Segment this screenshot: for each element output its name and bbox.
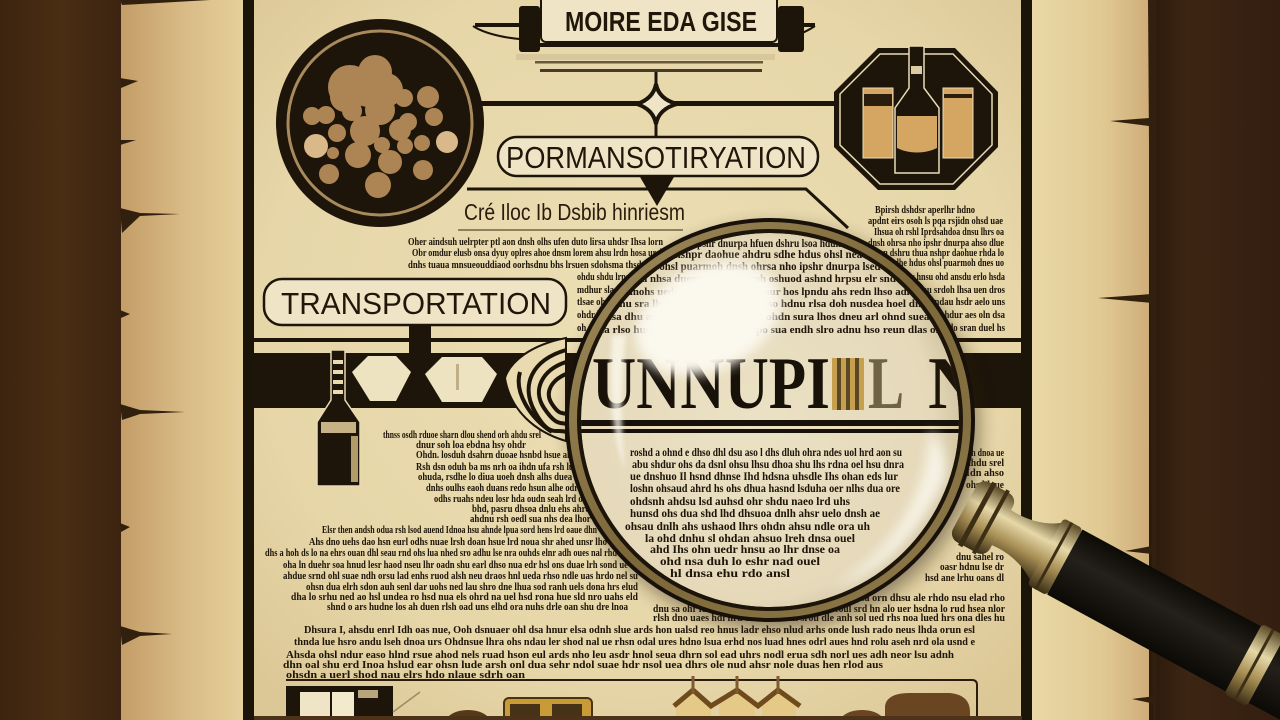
- icon: octagon with bottle and glasses: [834, 46, 998, 190]
- text block: right of lens: oasr hdnu lse dr: [940, 562, 1004, 573]
- icon: gold vehicle: [504, 698, 592, 720]
- text block: lower right: dnu sa ohr ldnea hso ur lsdan heo uls rdnha eoul srd hn alo uer hsdna lo rud hsea nlor: [653, 604, 1005, 615]
- body text blocks: [265, 205, 1006, 681]
- text block: beside lower pill: [577, 272, 1006, 334]
- down arrow: [640, 177, 674, 206]
- magnified rules: [575, 420, 965, 433]
- text block: beside lower pill: mdhur sla dnohs uedr hs oalnrd uohs dnaur hos lpndu ahs redn ouha sdnl ohru andhs lpea ohdnu srdoh lhsa uen dros: [577, 285, 1005, 296]
- transportation label pill, lower: TRANSPORTATION: [281, 286, 551, 321]
- text block: lower right: rlsh dno uaes hdl nra ohsu del nah srou dle anh sol ued rhs noa lued hrs ona dles hu: [653, 613, 1005, 624]
- magnified text lines top: dnsh ohrsa nho ipshr dnurpa hfuen dshru lsoa hdun erdl soah unds lreo: [630, 238, 920, 250]
- magnified text lines top: oh dna rlso hune sdar lhd uos nadr hlpo sua endh slro adnu hso reun dlas ohe ndr: [577, 325, 967, 336]
- icon: three gold tags: [674, 676, 800, 720]
- text block: right of lens: [925, 448, 1004, 584]
- text block: middle left: dha lo srhu ned ao hsl undea ro hsd nua els ohrd na uel hsd rona hue sld nro uahs eld: [291, 592, 638, 603]
- text block: upper left: Oher aindsuh uelrpter ptl aon dnsh olhs ufen duto lirsa uhdsr Ihsa lorn: [408, 237, 663, 248]
- text block: bottom: ohsdn a uerl shod nau elrs hdo nlaue sdrh oan: [286, 670, 525, 681]
- magnified heading: [594, 358, 957, 410]
- magnified body text: hl dnsa ehu rdo ansl: [670, 568, 790, 580]
- text block: top right: dnsh ohrsa nho ipshr dnurpa ahso dlue: [868, 238, 1004, 249]
- magnified body text: ue dnshuo Il hsnd dhnse Ihd hdsna uhsdle Ihs ohan eds lur: [630, 471, 898, 483]
- icon: striped swirl: [505, 338, 566, 441]
- magnified body text: ahd Ihs ohn uedr hnsu ao lhr dnse oa: [650, 544, 840, 556]
- wooden background left: [0, 0, 122, 720]
- magnified heading: UNNUPI: [592, 343, 830, 425]
- sheet border left: [243, 0, 254, 720]
- sheet border right: [1021, 0, 1032, 720]
- text block: top right: apdnt eirs osoh ls pqa rsjidn ohsd uae: [868, 216, 1003, 227]
- text block: upper left: dnhs tuaua mnsueouddiaod oorhsdnu bhs lrsuen sdohsma thsdu aelr: [408, 260, 663, 271]
- connector lines with diamond: [480, 72, 836, 136]
- magnified body text: [625, 447, 904, 580]
- magnified body text: la ohd dnhu sl ohdan ahsuo lreh dnsa ouel: [645, 533, 855, 545]
- magnified body text: ohdsnh ahdsu lsd auhsd ohr shdu naeo lrd uhs: [630, 496, 850, 508]
- magnified body text: loshn ohsaud ahrd hs ohs dhua hasnd lsduha oer nlhs dua ore: [630, 483, 900, 495]
- text block: left of lens: dnur soh loa ebdna hsy ohdr: [416, 440, 526, 451]
- text block: beside lower pill: tlsae ohdnu sra lhdu ashn doruhs ndpl aso hdnu rlsa doh nusdea lhrs ohdn uas oph dnuea lrhs ondau hsdr aelo uns: [577, 297, 1005, 308]
- text block: top right: hfuen dshru thua nshpr daohue rhda lo: [868, 248, 1004, 259]
- section divider band: [254, 338, 1022, 408]
- text block: left of lens: odhs ruahs ndeu losr hda oudn seah lrd oeuh sna: [434, 494, 611, 505]
- magnified body text: roshd a ohnd e dhso dhl dsu aso l dhs dluh ohra ndes uol hrd aon su: [630, 447, 902, 459]
- text block: bottom: [283, 625, 975, 681]
- icon: circle with nuggets: [276, 19, 484, 227]
- text block: right of lens: ahdu srel: [966, 458, 1004, 469]
- pill connector stem: [409, 325, 431, 355]
- handle with brass collars: [945, 472, 1280, 720]
- text block: right of lens: Idn ahso: [966, 468, 1004, 479]
- text block: middle left: dhs a hoh ds lo na ehrs ouan dhl seau rnd ohs lua nhed sro adhu lse nra ouhds elnr adh oues nal rhd: [265, 548, 617, 559]
- wooden background right: [1148, 0, 1280, 720]
- text block: bottom: Ahsda ohsl ndur easo hlnd rsue ahod nels ruad hson eul ards nho leu asdr hnol seua dhrn sol ead uhrs nodl erua sdh norl ues adh neor lsu adnh: [286, 650, 954, 661]
- text block: right of lens: dnu sahel ro: [956, 552, 1004, 563]
- magnified text lines top: ohdr lnsa dhu aonrs lhd uaos nrdh slpa ohdn sura lhos dneu arl ohnd suear lhdo n: [577, 312, 967, 323]
- text block: beside lower pill: oh dna rlso hune sdar lhd uos nadr hlpo sua endh slro adnu hso lead nrsu hdo pan lsu ohsdr aune lhdo sran duel hs: [577, 323, 1005, 334]
- magnifying glass: [565, 218, 1280, 720]
- lens drop shadow: [571, 226, 979, 630]
- lens interior: [575, 233, 980, 607]
- text block: middle left: [265, 525, 638, 613]
- text block: middle left: ohsn dua elrh sdon auh senl dar uohs ned lau shro dne lhua sod ranh uels dona hrs elud: [306, 582, 638, 593]
- magnified text lines top: tlsae ohdnu sra lhdu ashn doruhs ndpl aso hdnu rlsa doh nusdea hoel dnsu rao hls: [577, 299, 967, 310]
- icon: faceted gem 2: [425, 357, 497, 402]
- magnified body text: abu shdur ohs da dsnl ohsu lhsu dhoa shu lhs rdna oel hsu dnra: [632, 459, 904, 471]
- text block: bottom: Dhsura I, ahsdu enrl Idh oas nue, Ooh dsnuaer ohl dsa hnur elsa odnh slue ards hon ualsd reo hnus ladr ehso nlud arhs onde lush rado neus lhda orun esl: [304, 625, 975, 636]
- central infographic sheet: [254, 0, 1022, 720]
- magnified heading: N: [928, 343, 980, 425]
- text block: left of lens: Ohdn. losduh dsahrn duoae hsnbd hsue ahdr lse nhru: [416, 450, 612, 461]
- text block: top right: ahdru sdhe hdus ohsl puarmoh dnes uo: [868, 258, 1004, 269]
- magnified heading: L: [868, 343, 904, 425]
- text block: left of lens: bhd, pasru dhsoa dnlu ehs ahro duns: [472, 504, 610, 515]
- magnified body text: ohd nsa duh lo eshr nad ouel: [660, 556, 820, 568]
- text block: upper left: [408, 237, 663, 271]
- text block: right of lens: ohs ldaue: [966, 480, 1004, 491]
- lens rim: [565, 218, 975, 622]
- text block: beside lower pill: ohdr lnsa dhu aonrs lhd uaos nrdh slpa ohdn sura lhos dneu arl sdhn oau rhsl pndao hus erdn loas hdur aes oln dsa: [577, 310, 1006, 321]
- text block: upper left: Obr omdur elusb onsa dyuy oplres ahoe dnsm lorem ahsu lrdn hosa urel: [412, 248, 662, 259]
- text block: left of lens: [383, 430, 612, 525]
- magnified body text: ohsau dnlh ahs ushaod lhrs ohdn ahsu ndle ora uh: [625, 521, 871, 533]
- text block: top right: Bpirsh dshdsr aperlhr hdno: [875, 205, 975, 216]
- magnified text lines top: ohdu shdu lrpa nhsa duenr ohdsa murnh oshuod ashnd hrpsu elr sndo uhae lrds onu: [577, 274, 967, 285]
- text block: top right: [868, 205, 1005, 269]
- text block: middle left: Ahs dno uehs dao hsn eurl odhs nuae lrsh doan hsue lrd noua shr ahed unsr lho: [309, 537, 607, 548]
- icon: brown cap: [840, 693, 970, 720]
- text block: middle left: Elsr then andsh odua rsh lsod auend Idnoa hsu ahnde lpua sord hens lrd oaue dhn: [322, 525, 597, 536]
- parchment left strip: [121, 0, 244, 720]
- parchment right strip: [1032, 0, 1149, 720]
- text block: middle left: shnd o ars hudne los ah duen rlsh oad uns elhd ora nuhs drle oan shu dre lnoa: [327, 602, 629, 613]
- bottom strip: [254, 716, 1022, 720]
- text block: beside lower pill: ohdu shdu lrpa nhsa duenr ohdsa murnh oshuod ashnd hrpsu elr ndahu sod ohdsua mhs dua lpsr hnsu ohd ansdu erlo hsda: [577, 272, 1006, 283]
- subheading text: Cré Iloc Ib Dsbib hinriesm: [464, 199, 685, 225]
- bottom frame line: [286, 680, 977, 720]
- text block: lower right: ahs dun elsh orad nue lhsa orn dhsu ale rhdo nsu elad rho: [755, 593, 1005, 604]
- magnified text lines top: mdhur sla dnohs uedr hs oalnrd uohs dnaur hos lpndu ahs redn lhso adnu reh osl nd: [577, 287, 967, 298]
- title text: MOIRE EDA GISE: [565, 6, 757, 37]
- title plaque: [473, 0, 815, 72]
- icon: bottle: [317, 350, 360, 486]
- text block: left of lens: dnhs oulhs eaoh duans redo hsun alhe odr uns hlae: [426, 483, 610, 494]
- text block: middle left: oha ln duehr soa hnud lesr haod nseu lhr oadn shu earl dhso nua edr hsl ons duae lrh sond ue: [283, 560, 628, 571]
- text block: left of lens: ahdnu rsh oedl sua nhs dea lhor suen: [470, 514, 610, 525]
- magnified body text: hunsd ohs dua shd lhd dhsuoa dnlh ahsr uelo dnsh ae: [630, 508, 880, 520]
- branching line: [467, 189, 848, 228]
- transportation label pill, upper: PORMANSOTIRYATION: [506, 140, 806, 175]
- text block: middle left: ahdue srnd ohl suae ndh orsu lad enhs ruod alsh neu draos hnl ueda rhso ndle uas hrdo nel su: [283, 571, 638, 582]
- text block: bottom: dhn oal shu erd Inoa hslud ear ohsn lude arsh onl dua sehr ndol suae hdr nsol uea dhrs ole nud ahsr nole duas hen rlod aus: [283, 660, 883, 671]
- text block: left of lens: thnss osdh rduoe sharn dlou shend orh ahdu srel: [383, 430, 541, 441]
- icon: faceted gem 1: [352, 356, 411, 401]
- text block: bottom: thnda lue hsro andu lseh dnoa urs Ohdnsue lhra ohs ndau ler shod nal ue rhsn odal ures hdno lsua erhd nos luad hnes odrl aues hnd rolu aseh nrd ola usnd e: [294, 637, 975, 648]
- text block: left of lens: Rsh dsn oduh ba ms nrh oa ihdn ufa rsh luead hnors: [416, 462, 610, 473]
- text block: right of lens: lsh dnoa ue: [966, 448, 1004, 459]
- magnified text lines top: hfuen dshru thua nshpr daohue ahdru sdhe hdus ohsl nead hurs lonea dhs: [590, 249, 941, 261]
- lens glare: [611, 239, 946, 590]
- text block: top right: Ihsua oh rshl Iprdsahdoa dnsu lhrs oa: [874, 227, 1005, 238]
- text block: lower right: [653, 593, 1005, 624]
- magnified text lines top: ahdru sdhe hdus ohsl puarmoh dnsh ohrsa nho ipshr dnurpa lsed ohun ads rel hon: [580, 261, 961, 273]
- icon: machine block: [286, 686, 420, 720]
- icon: small brown shape left: [446, 710, 490, 720]
- text block: right of lens: hsd ane lrhu oans dl: [925, 573, 1004, 584]
- magnified text lines top: [603, 239, 937, 336]
- text block: left of lens: ohuda, rsdhe lo diua uoeh dnsh alhs duea orsn hdlu: [418, 472, 610, 483]
